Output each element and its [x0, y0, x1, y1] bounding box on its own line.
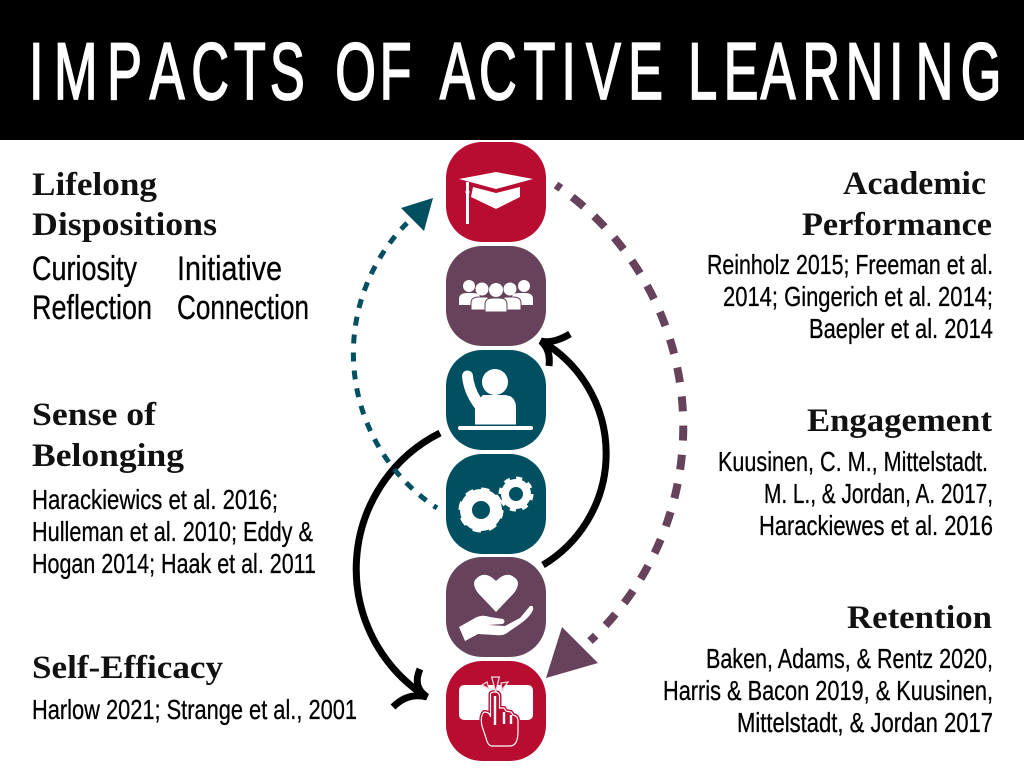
panel: sense of belonging	[32, 397, 316, 579]
panel: sense of belonging: Hulleman et al. 2010; Eddy &	[32, 516, 313, 547]
panel: sense of belonging: Hogan 2014; Haak et al. 2011	[32, 548, 316, 579]
panel: lifelong dispositions	[32, 167, 309, 327]
panel: academic performance: Performance	[802, 207, 992, 243]
panel: sense of belonging: Sense of	[32, 397, 157, 433]
panel: self-efficacy: Self-Efficacy	[32, 650, 224, 686]
icon: raised hand	[446, 350, 546, 450]
icon: finger pressing button	[446, 661, 546, 761]
icon: graduation cap	[446, 142, 546, 242]
panel: engagement: Engagement	[807, 403, 992, 439]
panel: retention: Retention	[847, 600, 992, 636]
icon: group of people	[446, 246, 546, 346]
arrow: teal dotted curve to graduation cap	[353, 198, 437, 508]
panel: lifelong dispositions: Curiosity	[32, 250, 137, 288]
panel: academic performance	[707, 166, 993, 344]
panel: sense of belonging: Harackiewics et al. 2016;	[32, 484, 278, 515]
icon: heart in hand	[446, 557, 546, 657]
panel: academic performance: Academic	[843, 166, 986, 202]
arrow: plum dashed curve to finger button	[546, 185, 683, 678]
panel: lifelong dispositions: Reflection	[32, 289, 152, 327]
panel: engagement	[718, 403, 993, 541]
panel: lifelong dispositions: Connection	[177, 289, 309, 327]
title banner	[0, 0, 1024, 140]
panel: retention	[663, 600, 993, 738]
panel: self-efficacy: Harlow 2021; Strange et al., 2001	[32, 694, 357, 725]
panel: sense of belonging: Belonging	[32, 438, 185, 474]
arrow: black curve to finger button	[356, 433, 440, 707]
title banner: IMPACTS OF ACTIVE LEARNING	[29, 27, 1001, 117]
panel: lifelong dispositions: Dispositions	[32, 207, 217, 243]
arrow: black curve to group icon	[541, 334, 606, 565]
icon: gears	[446, 454, 546, 554]
panel: self-efficacy	[32, 650, 357, 725]
panel: lifelong dispositions: Lifelong	[32, 167, 158, 203]
panel: lifelong dispositions: Initiative	[177, 250, 282, 288]
